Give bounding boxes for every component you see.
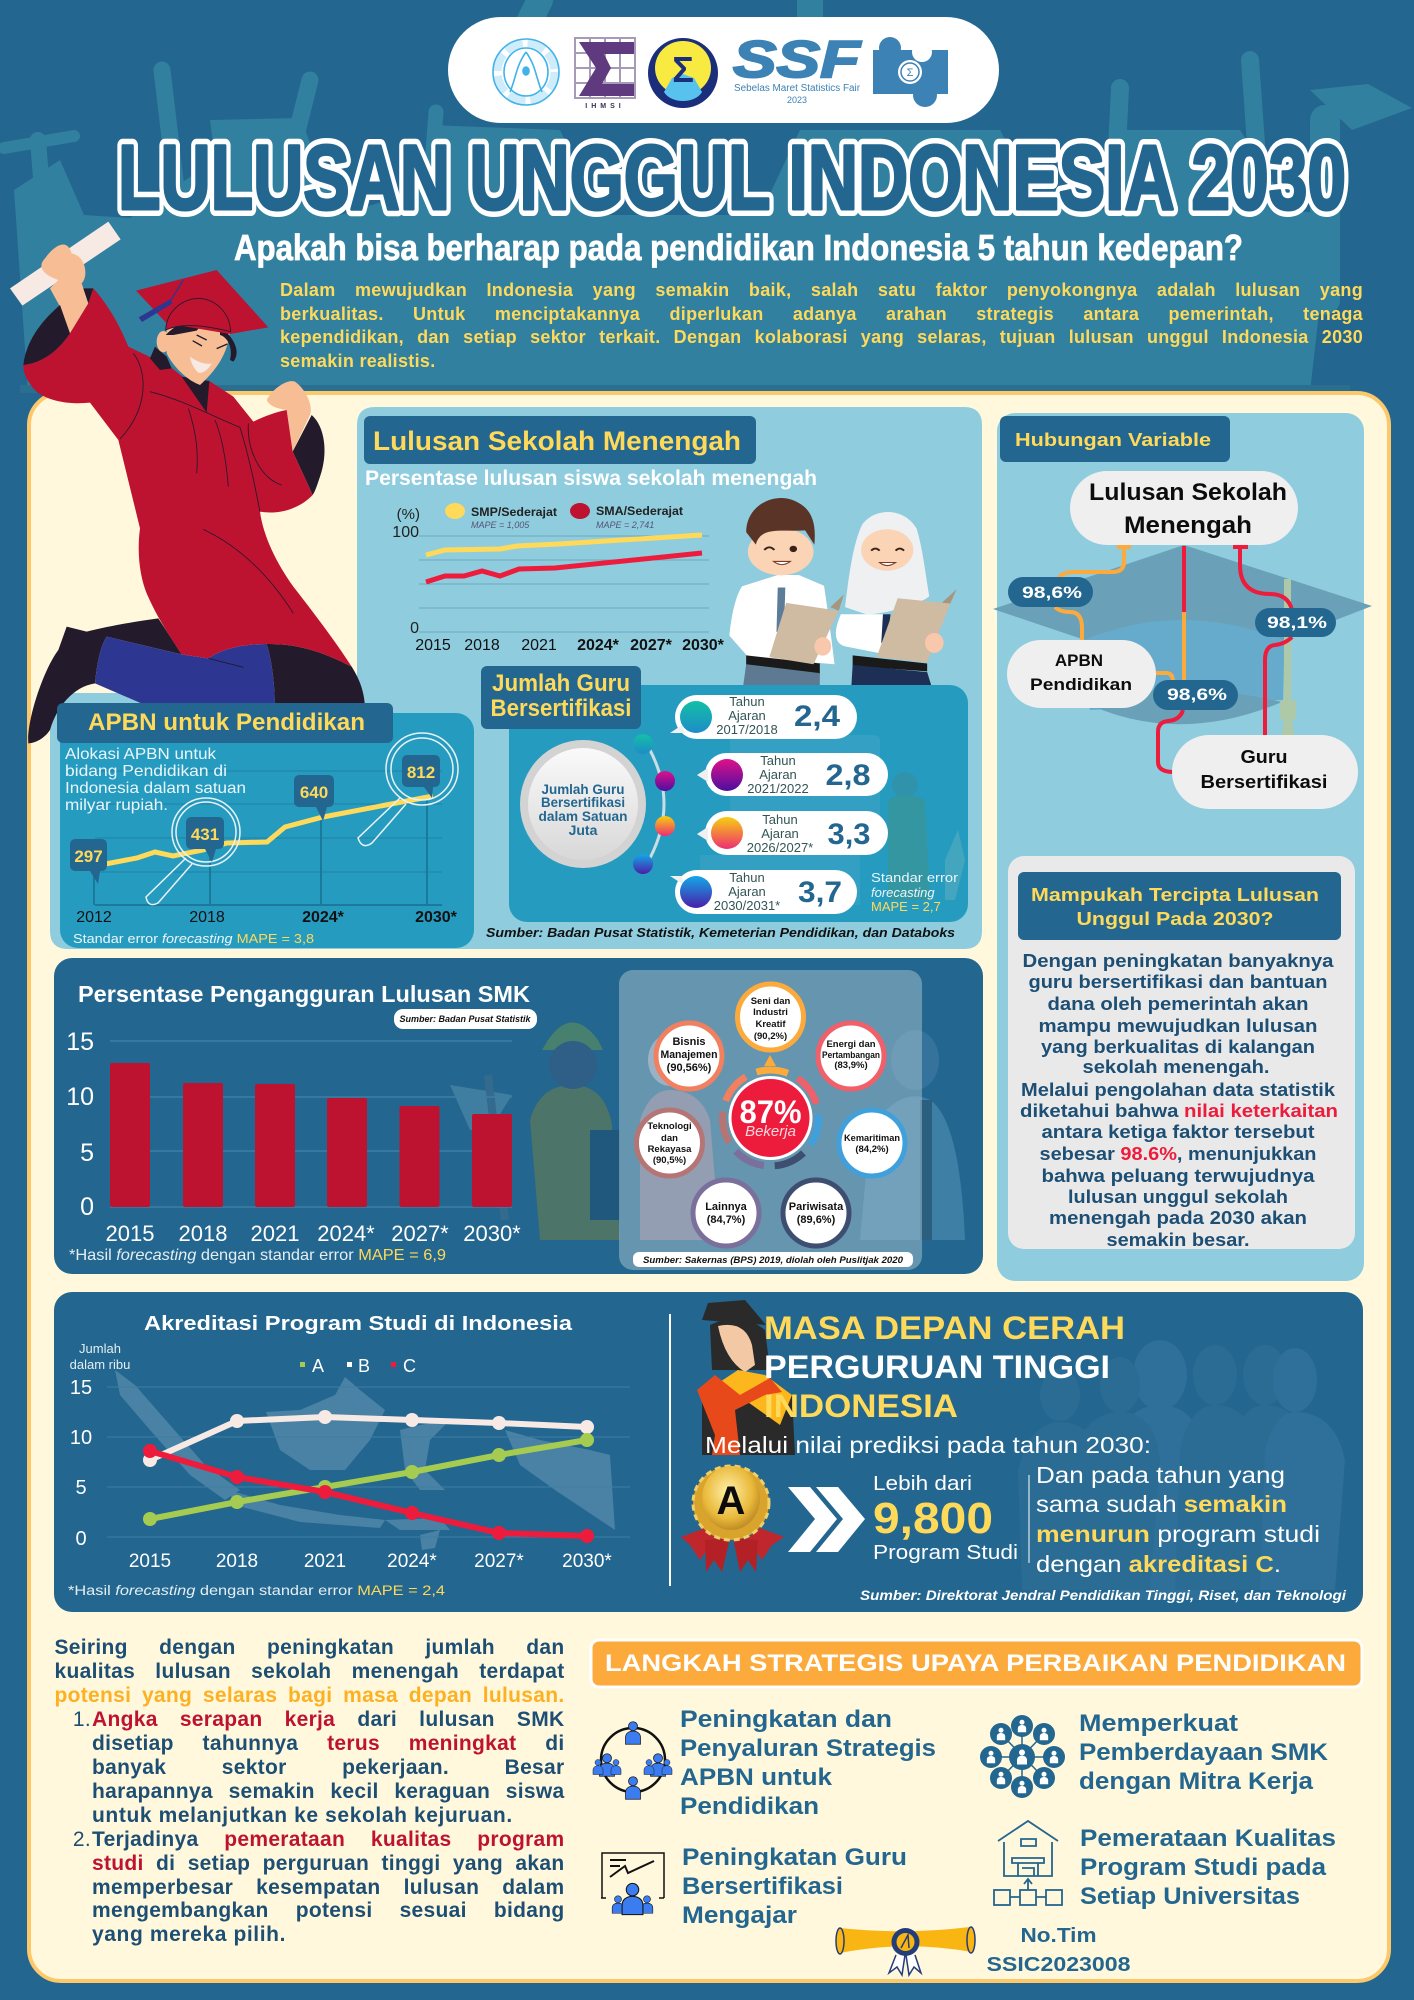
- central ring: [722, 1055, 818, 1166]
- subheading: Persentase lulusan siswa sekolah menengah: [365, 467, 817, 490]
- source pill: Sumber: Sakernas (BPS) 2019, diolah oleh Puslitjak 2020: [643, 1255, 904, 1266]
- stat: 9,800 program studi: [873, 1473, 1018, 1564]
- line chart: Akreditasi: 2015: [129, 1551, 171, 1572]
- logo: IHMSI sigma: IHMSI: [585, 103, 625, 110]
- line chart: Akreditasi: 15: [70, 1377, 92, 1399]
- heading: [364, 416, 756, 464]
- line chart: Akreditasi: 2024*: [387, 1551, 437, 1572]
- bubble: 2030/2031: Ajaran: [728, 884, 766, 899]
- standard error note: MAPE = 2,7: [871, 899, 941, 914]
- standard error note: [871, 870, 959, 914]
- node: APBN Pendidikan: Pendidikan: [1030, 675, 1132, 694]
- sector: Lainnya: Lainnya: [705, 1201, 748, 1213]
- body text: Melalui pengolahan data statistik: [1021, 1080, 1336, 1100]
- label 297: [70, 839, 107, 884]
- strategy: Memperkuat SMK: [980, 1710, 1329, 1798]
- illustration: woman graduate: [697, 1300, 795, 1455]
- description: Indonesia dalam satuan: [65, 780, 246, 797]
- legend: SMA/Sederajat: [596, 504, 683, 518]
- icon: school building: [994, 1821, 1062, 1905]
- body text: bahwa peluang terwujudnya: [1042, 1166, 1316, 1186]
- text: Pemerataan Kualitas: [1080, 1825, 1336, 1852]
- panel: Akreditasi and Masa Depan: [54, 1292, 1363, 1612]
- team number: SSIC2023008: [986, 1954, 1130, 1976]
- line chart: [392, 503, 725, 654]
- panel: Jumlah Guru Bersertifikasi: [481, 666, 968, 922]
- heading: Lulusan Sekolah Menengah: [373, 426, 741, 456]
- sector: Bisnis: [656, 1023, 722, 1089]
- strategy: APBN: [593, 1706, 936, 1820]
- panel: Hubungan Variable: [993, 413, 1372, 1281]
- text: Dalam mewujudkan Indonesia yang semakin baik, salah satu faktor penyokongnya adalah lulusan yang: [280, 280, 1363, 300]
- subtitle: Apakah bisa berharap pada pendidikan Indonesia 5 tahun kedepan?: [234, 227, 1243, 268]
- sector: Seni: Kreatif: [755, 1019, 786, 1030]
- heading: Hubungan Variable: [1015, 430, 1211, 450]
- heading: [1000, 416, 1230, 462]
- sector: Seni: Seni dan: [751, 996, 790, 1007]
- bar chart: 10: [66, 1083, 94, 1111]
- central ring: 87%: [740, 1094, 802, 1130]
- icon: teacher board: [601, 1853, 664, 1915]
- line chart: Akreditasi: dalam ribu: [70, 1357, 130, 1372]
- body text: antara ketiga faktor tersebut: [1042, 1122, 1315, 1142]
- label 431: 431: [191, 825, 219, 844]
- body text: yang berkualitas di kalangan: [1041, 1037, 1315, 1057]
- sector: Bisnis: (90,56%): [667, 1062, 712, 1074]
- legend: C: [403, 1356, 416, 1376]
- sector: Pariwisata: Pariwisata: [789, 1201, 844, 1213]
- central circle: Juta: [569, 822, 598, 838]
- text: kualitas lulusan sekolah menengah terdapat: [54, 1660, 564, 1683]
- line chart: APBN: 2030*: [415, 909, 458, 926]
- bar chart: 5: [80, 1139, 94, 1167]
- banner: Langkah Strategis: LANGKAH STRATEGIS UPAYA PERBAIKAN PENDIDIKAN: [605, 1650, 1346, 1677]
- text: harapannya semakin kecil keraguan siswa: [92, 1780, 564, 1803]
- text: potensi yang selaras bagi masa depan lulusan.: [54, 1684, 564, 1707]
- forecasting note: *Hasil forecasting dengan standar error MAPE = 2,4: [68, 1583, 446, 1598]
- text: memperbesar kesempatan lulusan dalam: [92, 1876, 564, 1899]
- background people silhouettes: [1018, 1340, 1345, 1600]
- legend: MAPE = 2,741: [596, 520, 654, 530]
- body text: sebesar 98.6% , menunjukkan: [1040, 1144, 1316, 1164]
- label 431: [186, 817, 224, 862]
- bubble: 2021/2022: Ajaran: [759, 767, 797, 782]
- body text: sekolah menengah.: [1082, 1057, 1270, 1077]
- description: bidang Pendidikan di: [65, 763, 227, 780]
- line chart: Akreditasi: [70, 1341, 630, 1572]
- stat: 9,800 program studi: 9,800: [873, 1494, 993, 1543]
- text: [1079, 1710, 1329, 1795]
- sector: Seni: [738, 984, 804, 1050]
- bubble: 2030/2031: [670, 870, 857, 914]
- node: Lulusan Sekolah Menengah: [1070, 471, 1298, 545]
- closing paragraph with numbered list: [54, 1636, 565, 1946]
- text: berkualitas. Untuk menciptakannya diperlukan adanya arahan strategis antara pemerintah, tenaga: [280, 304, 1363, 324]
- logo: himpunan sigma badge: Σ: [672, 49, 694, 90]
- text: untuk melanjutkan ke sekolah kejuruan.: [92, 1804, 513, 1827]
- node: Lulusan Sekolah Menengah: Lulusan Sekolah: [1089, 479, 1287, 506]
- line chart: Akreditasi: 2027*: [474, 1551, 524, 1572]
- radial diagram: 87% bekerja: [636, 984, 905, 1246]
- translucent panel: [619, 970, 922, 1270]
- source pill: [394, 1009, 537, 1029]
- bubble: 2021/2022: 2,8: [826, 759, 870, 792]
- text: [1080, 1825, 1336, 1910]
- line chart: APBN: 2018: [189, 909, 225, 926]
- legend: B: [358, 1356, 370, 1376]
- legend: [300, 1356, 416, 1376]
- sector: Energi: (83,9%): [834, 1060, 868, 1071]
- sector: Lainnya: (84,7%): [707, 1214, 746, 1226]
- text: mengembangkan potensi sesuai bidang: [92, 1899, 564, 1922]
- central circle: Jumlah Guru: [542, 781, 624, 797]
- bubble: 2030/2031: 3,7: [798, 876, 842, 909]
- line chart: Akreditasi: 2021: [304, 1551, 346, 1572]
- node: Guru Bersertifikasi: Bersertifikasi: [1200, 772, 1328, 792]
- arrow: double chevron: [788, 1487, 865, 1552]
- text: APBN untuk: [680, 1764, 833, 1791]
- text: Pemberdayaan SMK: [1079, 1739, 1329, 1766]
- text: menurun akreditasi C: dengan akreditasi C .: [1036, 1551, 1281, 1577]
- description: [65, 746, 246, 814]
- diagram background: graduation cap: [993, 545, 1372, 735]
- illustration: jumping graduate: [10, 222, 365, 743]
- description: Alokasi APBN untuk: [65, 746, 217, 763]
- heading: Jumlah Guru: Bersertifikasi: [490, 695, 632, 722]
- heading: APBN: APBN untuk Pendidikan: [88, 709, 365, 736]
- line chart: 2027*: [630, 637, 673, 654]
- heading: Mampukah Tercipta Lulusan: [1031, 884, 1319, 905]
- source pill: Sumber: Badan Pusat Statistik: [400, 1014, 531, 1024]
- text: Setiap Universitas: [1080, 1883, 1300, 1910]
- bubble: 2026/2027: Tahun: [762, 812, 798, 827]
- value: 98,6% center: 98,6%: [1167, 685, 1227, 704]
- central ring: Bekerja: [745, 1123, 796, 1140]
- text: Memperkuat: [1079, 1710, 1238, 1737]
- text: menurun akreditasi C: [1036, 1462, 1320, 1577]
- main cream panel: [29, 393, 1389, 1981]
- body text: dana oleh pemerintah akan: [1048, 994, 1308, 1014]
- sector: Energi: [818, 1023, 884, 1089]
- line chart: APBN: 2012: [76, 909, 112, 926]
- standard error note: Standar error forecasting MAPE = 3,8: [73, 931, 314, 946]
- text: yang mereka pilih.: [92, 1923, 286, 1946]
- line chart: 2030*: [682, 637, 725, 654]
- text: semakin realistis.: [280, 351, 436, 371]
- heading: Unggul Pada 2030?: [1076, 908, 1274, 929]
- bubble: 2026/2027: 2026/2027*: [747, 840, 813, 855]
- subtitle text: Melalui nilai prediksi pada tahun 2030:: [705, 1432, 1151, 1458]
- body text: [1020, 951, 1338, 1250]
- bubble: 2021/2022: 2021/2022: [747, 781, 809, 796]
- stat: 9,800 program studi: Lebih dari: [873, 1473, 972, 1495]
- sector: Teknologi: [636, 1110, 702, 1176]
- panel: APBN untuk Pendidikan: [57, 703, 474, 948]
- heading: Jumlah Guru: Jumlah Guru: [492, 670, 630, 697]
- node: Guru Bersertifikasi: Guru: [1240, 747, 1288, 767]
- standard error note: Standar error: [871, 870, 959, 885]
- strategy: Guru: [601, 1844, 907, 1929]
- label 812: [402, 755, 440, 798]
- node: APBN Pendidikan: APBN: [1055, 651, 1103, 670]
- icon: people circle: [593, 1722, 672, 1799]
- sector: Teknologi: dan: [661, 1133, 678, 1144]
- team number: No.Tim: [1020, 1925, 1096, 1947]
- body text: menengah pada 2030 akan: [1049, 1208, 1307, 1228]
- line chart: 2024*: [577, 637, 620, 654]
- body text: guru bersertifikasi dan bantuan: [1028, 972, 1328, 992]
- logo: IHMSI sigma: [575, 38, 635, 110]
- value: 98,1%: 98,1%: [1267, 613, 1327, 632]
- intro paragraph: [280, 280, 1363, 371]
- bubble: 2030/2031: 2030/2031*: [714, 898, 780, 913]
- central circle: [520, 740, 646, 868]
- text: Mengajar: [682, 1902, 797, 1929]
- text: kependidikan, dan setiap sektor terkait. Dengan kolaborasi yang selaras, tujuan lulusan unggul Indonesia 2030: [280, 327, 1363, 347]
- bubble: 2017/2018: 2,4: [794, 700, 840, 733]
- text: Pendidikan: [680, 1793, 819, 1820]
- panel: Pengangguran Lulusan SMK: [54, 958, 983, 1274]
- sector: Bisnis: Bisnis: [672, 1036, 706, 1048]
- label 640: [294, 775, 334, 821]
- legend: A: [312, 1356, 324, 1376]
- bubble: 2017/2018: 2017/2018: [716, 722, 778, 737]
- line chart: Akreditasi: 10: [70, 1427, 92, 1449]
- label 297: 297: [74, 847, 103, 866]
- strategy: Pemerataan: [994, 1821, 1336, 1910]
- sector: Kemaritiman: (84,2%): [855, 1144, 889, 1155]
- node: Guru Bersertifikasi: [1172, 735, 1358, 809]
- panel: Lulusan Sekolah Menengah chart: [364, 416, 957, 686]
- text: studi di setiap perguruan tinggi yang akan: [92, 1852, 564, 1875]
- value: 98,6% center: [1153, 680, 1238, 710]
- text: Bersertifikasi: [682, 1873, 843, 1900]
- sector: Lainnya: [693, 1180, 759, 1246]
- logo: SSF: Sebelas Maret Statistics Fair: [734, 83, 861, 94]
- body text: mampu mewujudkan lulusan: [1038, 1016, 1318, 1036]
- crowd silhouette background: [4, 0, 1412, 392]
- background map: Indonesia: [115, 1370, 615, 1550]
- value: 98,1%: [1255, 608, 1336, 637]
- logo: himpunan sigma badge: [648, 38, 718, 108]
- line chart: 0: [410, 620, 419, 637]
- bubble: 2026/2027: Ajaran: [761, 826, 799, 841]
- body text: Dengan peningkatan banyaknya: [1022, 951, 1335, 971]
- sector: Bisnis: Manajemen: [660, 1049, 718, 1061]
- panel: Mampukah Tercipta: [1008, 856, 1355, 1250]
- text: Terjadinya pemerataan kualitas program: [92, 1828, 564, 1851]
- text: Seiring dengan peningkatan jumlah dan: [54, 1636, 564, 1659]
- sector: Energi: Pertambangan: [822, 1050, 880, 1061]
- logo: puzzle: Σ: [907, 67, 914, 79]
- legend: [445, 503, 683, 530]
- logo: puzzle: [873, 37, 948, 107]
- bar chart: 2018: [179, 1221, 227, 1246]
- bubble: 2017/2018: Tahun: [729, 694, 765, 709]
- legend: SMP/Sederajat: [471, 505, 557, 519]
- heading: [1018, 872, 1341, 940]
- text: menurun akreditasi C: menurun program studi: [1036, 1521, 1320, 1547]
- heading: APBN: [57, 703, 393, 743]
- forecasting note: *Hasil forecasting dengan standar error MAPE = 6,9: [69, 1247, 446, 1264]
- body text: semakin besar.: [1106, 1230, 1250, 1250]
- value: 98,6% APBN: [1008, 577, 1093, 607]
- sector: Teknologi: Rekayasa: [648, 1144, 692, 1155]
- label 640: 640: [300, 783, 328, 802]
- bubble: 2017/2018: [670, 694, 857, 739]
- logo: UNS seal: [493, 39, 559, 105]
- icon: diploma scroll: [836, 1927, 975, 1975]
- bar chart: 2027*: [391, 1221, 449, 1246]
- bar chart: 2030*: [463, 1221, 521, 1246]
- source note: Sumber: Direktorat Jendral Pendidikan Tinggi, Riset, dan Teknologi: [860, 1587, 1347, 1603]
- icon: gold medal A: [681, 1466, 784, 1572]
- line chart: (%): [397, 506, 420, 523]
- line chart: APBN: [70, 733, 458, 926]
- source pill: [633, 1252, 913, 1267]
- bubble: 2026/2027: 3,3: [828, 818, 870, 851]
- sector: Energi: Energi dan: [826, 1039, 876, 1050]
- icon: gold medal A: A: [717, 1479, 745, 1523]
- line chart: Akreditasi: Jumlah: [79, 1341, 121, 1356]
- text: Peningkatan Guru: [682, 1844, 907, 1871]
- text: Program Studi pada: [1080, 1854, 1327, 1881]
- team number: [986, 1925, 1130, 1976]
- sector: Pariwisata: (89,6%): [797, 1214, 836, 1226]
- standard error note: forecasting: [871, 885, 935, 900]
- line chart: APBN: 2024*: [302, 909, 345, 926]
- text: menurun akreditasi C: sama sudah semakin: [1036, 1491, 1287, 1517]
- line chart: 100: [392, 524, 419, 541]
- stat: 9,800 program studi: Program Studi: [873, 1542, 1018, 1564]
- bar chart: 2024*: [317, 1221, 375, 1246]
- text: dengan Mitra Kerja: [1079, 1768, 1314, 1795]
- logo: SSF: [733, 31, 862, 105]
- text: 1.: [73, 1708, 91, 1731]
- banner: Langkah Strategis: [591, 1640, 1362, 1687]
- bubble: 2026/2027: [697, 811, 888, 855]
- illustration: students: [729, 498, 957, 686]
- central circle: dalam Satuan: [538, 808, 628, 824]
- illustration: workers background: [450, 1022, 965, 1240]
- source note: Sumber: Badan Pusat Statistik, Kemeterian Pendidikan, dan Databoks: [486, 925, 955, 940]
- node: APBN Pendidikan: [1007, 640, 1156, 708]
- bar chart: 2015: [106, 1221, 154, 1246]
- line chart: 2015: [415, 637, 451, 654]
- heading: Masa Depan Cerah: INDONESIA: [764, 1388, 958, 1424]
- connectors: [1055, 546, 1292, 772]
- bar chart: 0: [80, 1193, 94, 1221]
- line chart: Akreditasi: 0: [75, 1528, 87, 1550]
- background illustration: teacher: [700, 735, 965, 905]
- line chart: Akreditasi: 2018: [216, 1551, 258, 1572]
- bar chart: 2021: [251, 1221, 299, 1246]
- text: [680, 1706, 936, 1820]
- node: Lulusan Sekolah Menengah: Menengah: [1124, 512, 1252, 539]
- title: Akreditasi: Akreditasi Program Studi di Indonesia: [144, 1313, 573, 1335]
- bar chart: 15: [66, 1028, 94, 1056]
- text: [682, 1844, 907, 1929]
- line chart: Akreditasi: 2030*: [562, 1551, 612, 1572]
- logo: SSF: 2023: [787, 95, 807, 105]
- bubble: 2030/2031: Tahun: [729, 870, 765, 885]
- sector: Seni: (90,2%): [754, 1031, 787, 1042]
- sector: Kemaritiman: [839, 1110, 905, 1176]
- text: banyak sektor pekerjaan. Besar: [92, 1756, 564, 1779]
- sector: Teknologi: Teknologi: [647, 1121, 692, 1132]
- sector: Kemaritiman: Kemaritiman: [844, 1133, 900, 1144]
- text: disetiap tahunnya terus meningkat di: [92, 1732, 564, 1755]
- title: Persentase Pengangguran Lulusan SMK: [78, 981, 530, 1007]
- heading: Jumlah Guru: [481, 666, 641, 729]
- bubble: 2021/2022: [697, 753, 888, 796]
- icon: network: [980, 1715, 1065, 1798]
- body text: diketahui bahwa nilai keterkaitan: [1020, 1101, 1338, 1121]
- description: milyar rupiah.: [65, 797, 168, 814]
- sector: Seni: Industri: [753, 1007, 788, 1018]
- legend: MAPE = 1,005: [471, 520, 530, 530]
- central circle: Bersertifikasi: [541, 794, 625, 810]
- bubble: 2017/2018: Ajaran: [728, 708, 766, 723]
- sector: Teknologi: (90,5%): [653, 1155, 686, 1166]
- heading: Masa Depan Cerah: [764, 1310, 1125, 1424]
- body text: lulusan unggul sekolah: [1068, 1187, 1288, 1207]
- text: Penyaluran Strategis: [680, 1735, 936, 1762]
- text: Peningkatan dan: [680, 1706, 892, 1733]
- sector: Pariwisata: [783, 1180, 849, 1246]
- panel: Lulusan Sekolah Menengah backdrop: [50, 407, 982, 949]
- line chart: 2021: [521, 637, 557, 654]
- text: 2.: [73, 1828, 91, 1851]
- label 812: 812: [407, 763, 435, 782]
- connector arc with dots: [633, 734, 675, 874]
- magnifier: [146, 733, 458, 905]
- line chart: 2018: [464, 637, 500, 654]
- value: 98,6% APBN: 98,6%: [1022, 583, 1082, 602]
- line chart: Akreditasi: 5: [75, 1477, 87, 1499]
- bar chart: [66, 1028, 521, 1246]
- heading: Masa Depan Cerah: PERGURUAN TINGGI: [764, 1349, 1110, 1385]
- heading: Masa Depan Cerah: MASA DEPAN CERAH: [764, 1310, 1125, 1346]
- text: Angka serapan kerja dari lulusan SMK: [92, 1708, 565, 1731]
- text: menurun akreditasi C: Dan pada tahun yang: [1036, 1462, 1285, 1488]
- bubble: 2021/2022: Tahun: [760, 753, 796, 768]
- logo pill: [448, 17, 999, 123]
- logo: SSF: SSF: [733, 31, 862, 89]
